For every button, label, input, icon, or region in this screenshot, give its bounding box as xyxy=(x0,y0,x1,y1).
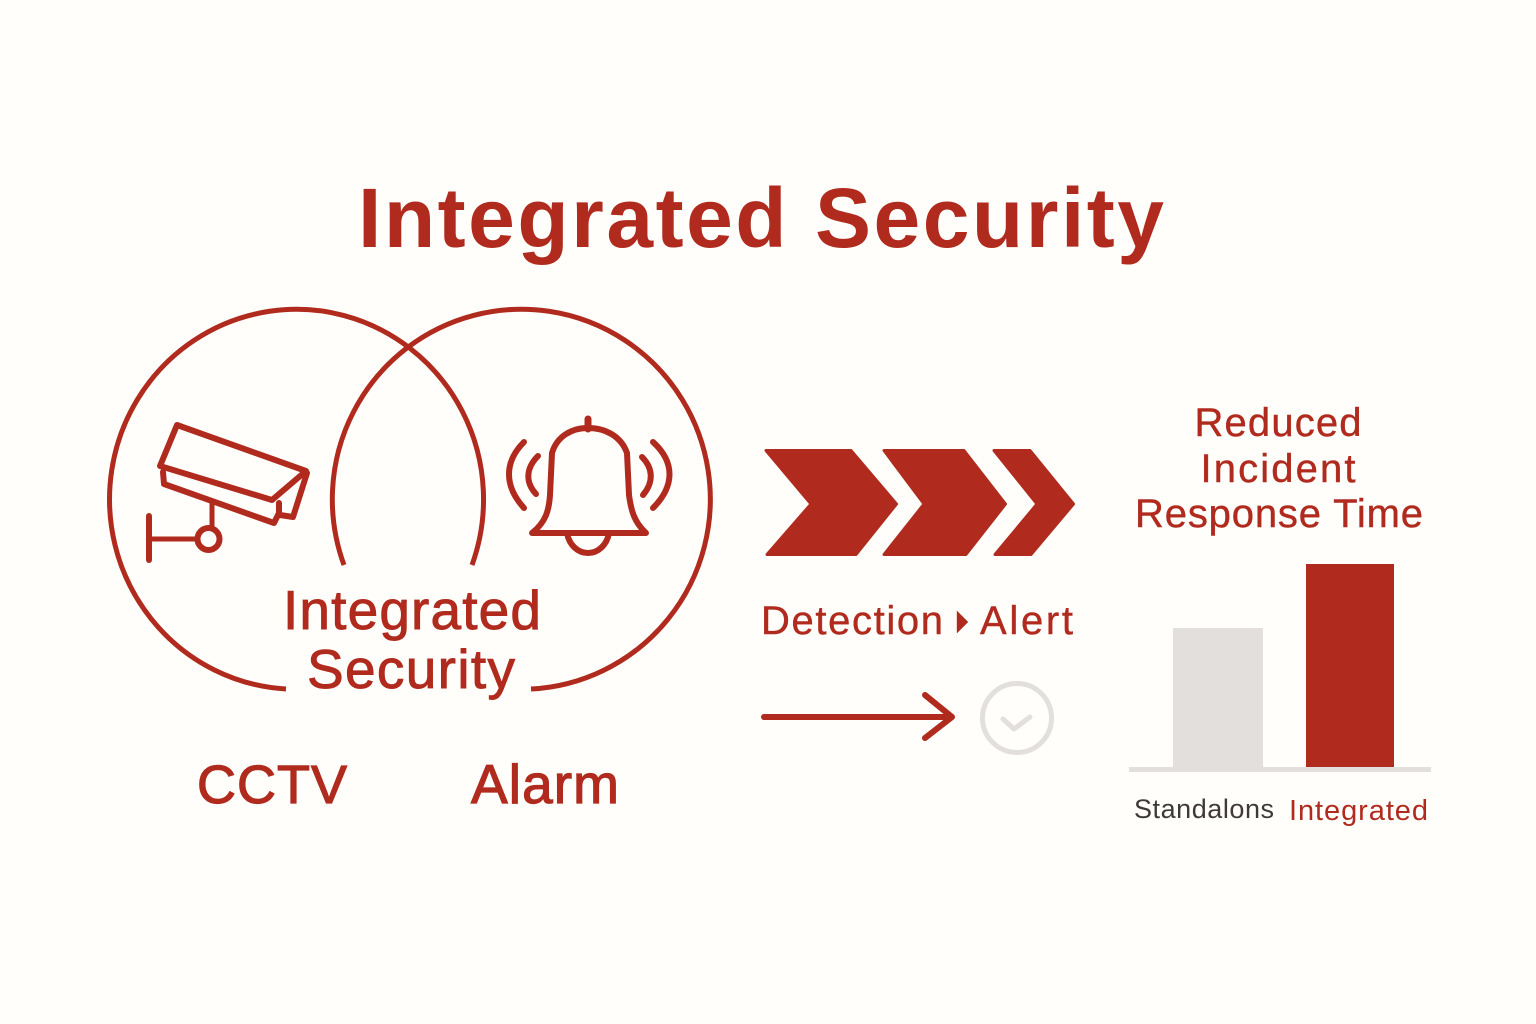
bar chart xyxy=(1129,564,1431,827)
detection to alert label: Detection xyxy=(761,599,943,643)
detection to alert label: Alert xyxy=(980,599,1073,643)
CCTV label: CCTV xyxy=(197,755,347,815)
small triangle xyxy=(957,611,968,633)
bar: integrated xyxy=(1306,564,1394,768)
venn overlap label: Integrated xyxy=(283,579,541,641)
response time heading xyxy=(1135,401,1423,536)
Alarm label: Alarm xyxy=(471,753,619,815)
detection to alert label xyxy=(761,599,1073,643)
response time heading: Incident xyxy=(1200,447,1356,491)
label: standalone: Standalons xyxy=(1134,794,1274,824)
icon: security camera xyxy=(149,425,307,560)
process chevrons xyxy=(766,450,1074,554)
axis xyxy=(1129,767,1431,772)
bar: standalone xyxy=(1173,628,1263,768)
arrow xyxy=(764,695,952,738)
label: integrated: Integrated xyxy=(1289,795,1428,827)
response time heading: Reduced xyxy=(1194,401,1362,445)
venn diagram xyxy=(110,309,710,689)
left circle: CCTV xyxy=(110,309,484,689)
title: Integrated Security xyxy=(358,171,1164,265)
right circle: Alarm xyxy=(332,309,710,689)
venn overlap label xyxy=(283,579,541,700)
response time heading: Response Time xyxy=(1135,492,1423,536)
venn overlap label: Security xyxy=(307,638,516,700)
icon: alarm bell xyxy=(509,419,670,553)
icon: check circle xyxy=(982,684,1052,752)
